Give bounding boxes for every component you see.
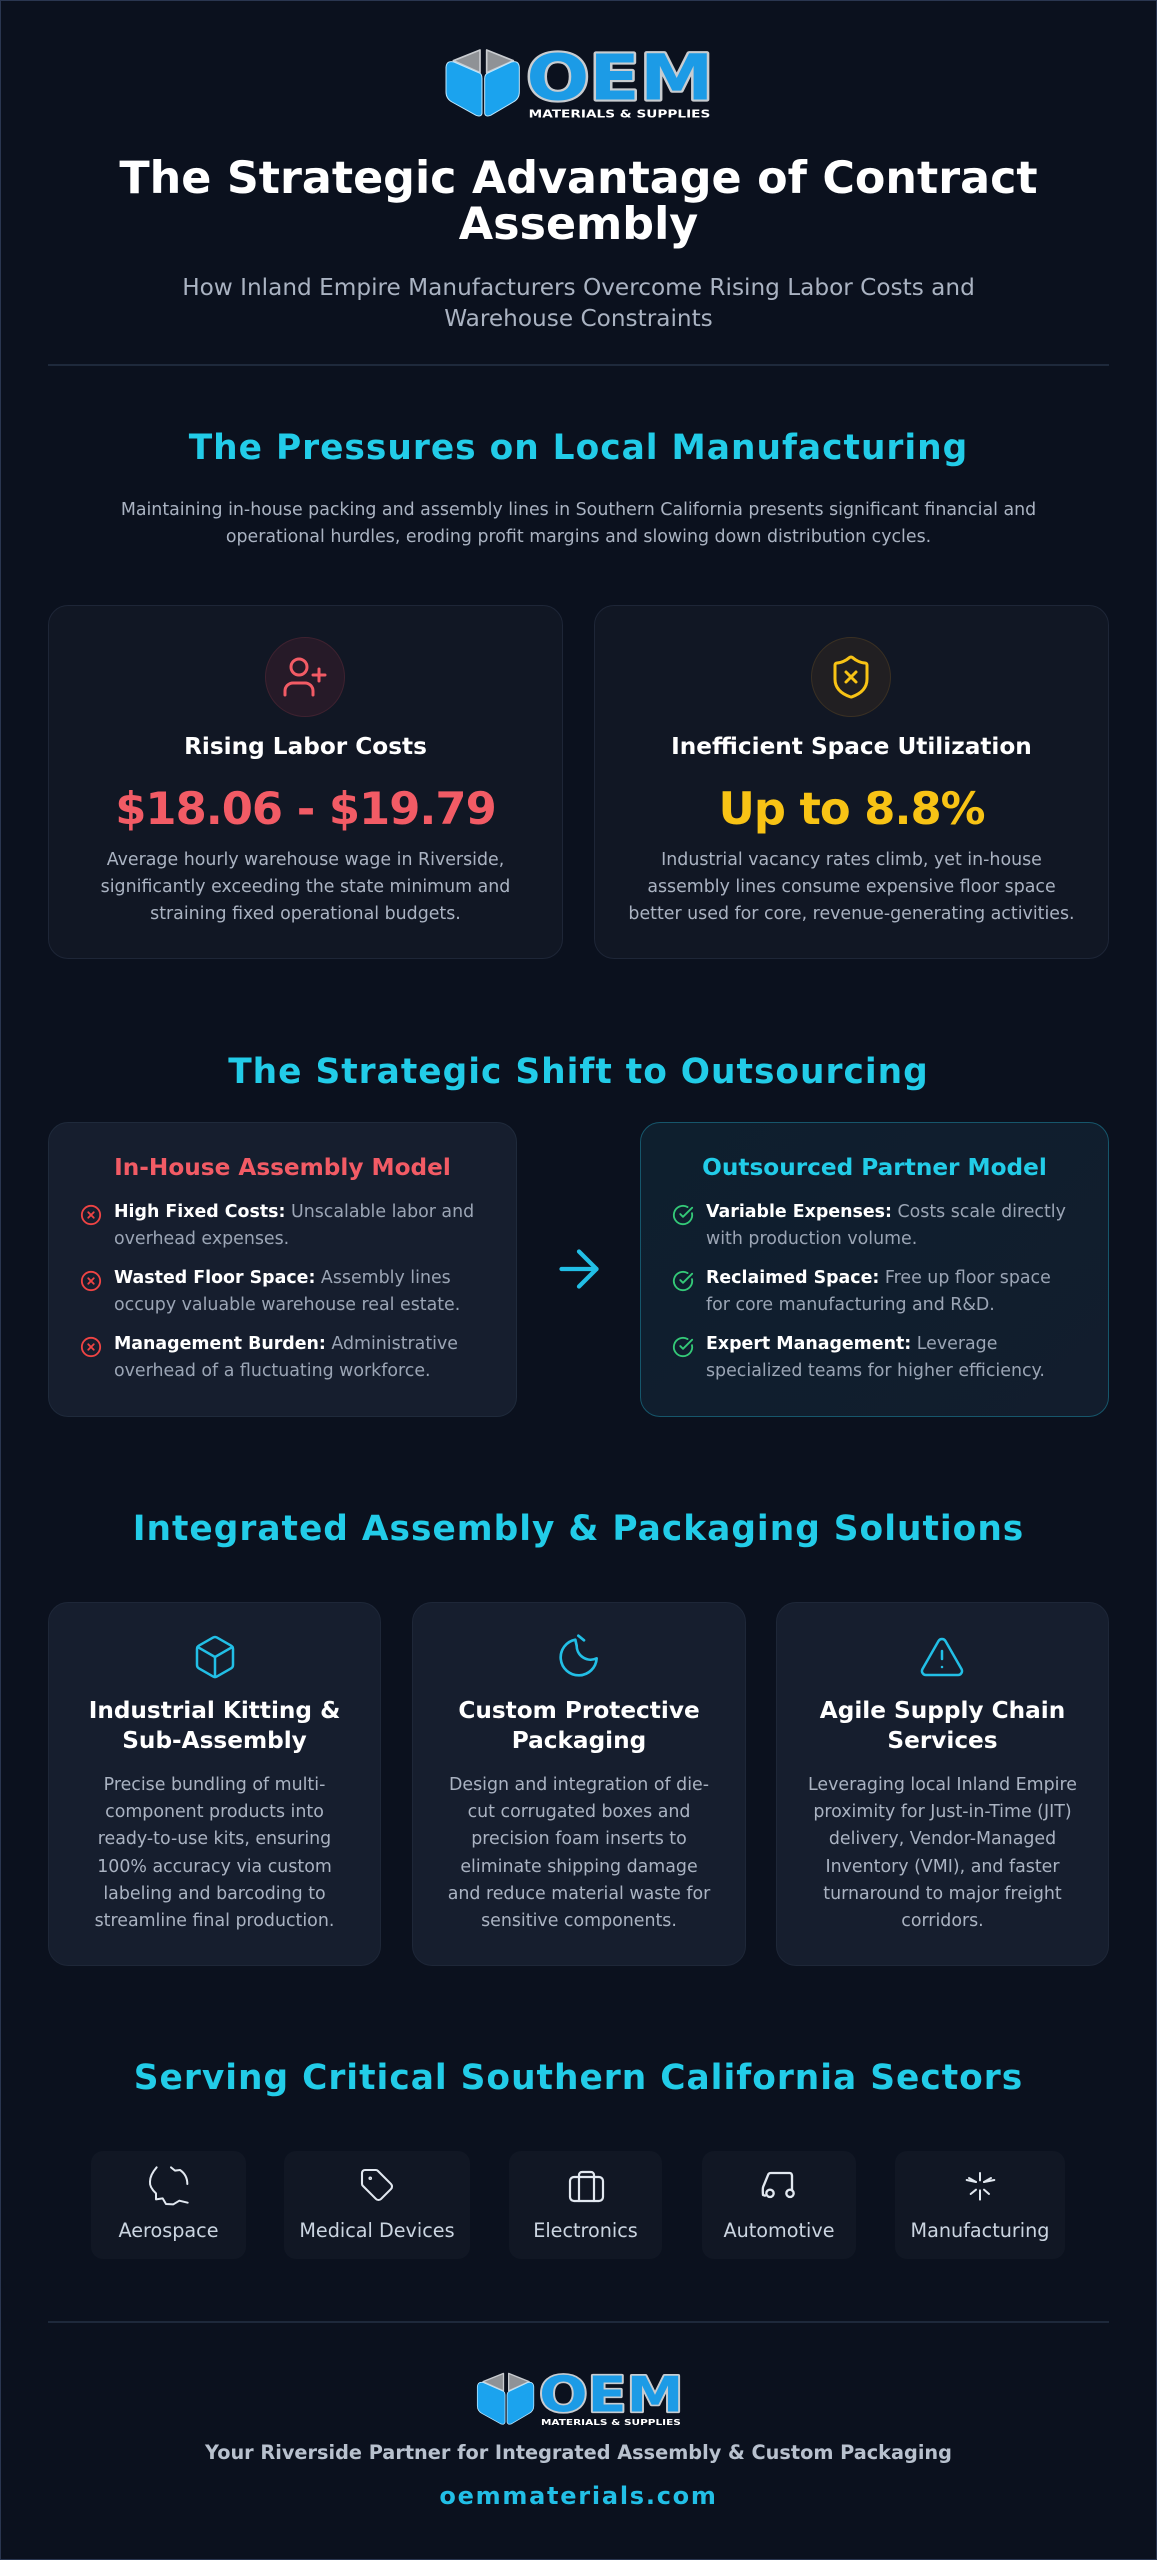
item: expert management: Expert Management: Leverage bbox=[706, 1334, 997, 1354]
arrow bbox=[559, 1249, 599, 1289]
description: eliminate shipping damage bbox=[460, 1857, 698, 1877]
item: wasted floor space: Wasted Floor Space: Assembly lines bbox=[114, 1268, 451, 1288]
card heading: Rising Labor Costs bbox=[184, 733, 427, 760]
chip: electronics bbox=[509, 2151, 662, 2259]
description: Design and integration of die- bbox=[449, 1775, 709, 1795]
item: reclaimed space: for core manufacturing and R&D. bbox=[706, 1295, 995, 1315]
panel: inefficient space bbox=[594, 605, 1109, 959]
card heading bbox=[820, 1697, 1065, 1754]
description bbox=[628, 850, 1075, 924]
item: management burden: Management Burden: Administrative bbox=[114, 1334, 458, 1354]
icon: user plus bbox=[265, 637, 345, 717]
icon: loader bbox=[966, 2172, 996, 2201]
panel: supply chain bbox=[776, 1602, 1109, 1966]
description: assembly lines consume expensive floor space bbox=[647, 877, 1056, 897]
subtitle bbox=[182, 274, 975, 332]
item: high fixed costs: High Fixed Costs: Unscalable labor and bbox=[114, 1202, 474, 1222]
icon: tag bbox=[360, 2169, 393, 2201]
card heading: Sub-Assembly bbox=[122, 1727, 307, 1754]
panel title: Outsourced Partner Model bbox=[702, 1154, 1047, 1181]
panel: kitting bbox=[48, 1602, 381, 1966]
item: expert management bbox=[672, 1334, 1045, 1381]
description: and reduce material waste for bbox=[448, 1884, 710, 1904]
chip: automotive bbox=[702, 2151, 856, 2259]
description: delivery, Vendor-Managed bbox=[829, 1829, 1056, 1849]
icon: shield x bbox=[811, 637, 891, 717]
logo: OEM Materials & Supplies: MATERIALS & SUPPLIES bbox=[529, 107, 710, 120]
heading: solutions: Integrated Assembly & Packaging Solutions bbox=[133, 1509, 1024, 1549]
description: Industrial vacancy rates climb, yet in-house bbox=[661, 850, 1042, 870]
description: straining fixed operational budgets. bbox=[150, 904, 461, 924]
description bbox=[808, 1775, 1077, 1931]
title: The Strategic Advantage of Contract bbox=[119, 153, 1038, 204]
item: variable expenses bbox=[672, 1202, 1066, 1249]
footer logo: MATERIALS & SUPPLIES bbox=[540, 2417, 680, 2427]
stat: Up to 8.8% bbox=[718, 782, 985, 835]
card heading: Packaging bbox=[512, 1727, 646, 1754]
logo: OEM Materials & Supplies: OEM bbox=[526, 41, 714, 115]
intro paragraph: operational hurdles, eroding profit margins and slowing down distribution cycles. bbox=[226, 527, 931, 547]
panel: in-house model bbox=[48, 1122, 517, 1417]
icon: box bbox=[196, 1636, 234, 1678]
chip: manufacturing bbox=[895, 2151, 1065, 2259]
card heading: Industrial Kitting & bbox=[89, 1697, 340, 1724]
description: sensitive components. bbox=[481, 1911, 677, 1931]
description: better used for core, revenue-generating activities. bbox=[628, 904, 1075, 924]
description: proximity for Just-in-Time (JIT) bbox=[813, 1802, 1072, 1822]
item: variable expenses: Variable Expenses: Costs scale directly bbox=[706, 1202, 1066, 1222]
item: management burden: overhead of a fluctuating workforce. bbox=[114, 1361, 431, 1381]
card heading: Custom Protective bbox=[458, 1697, 700, 1724]
footer tagline: Your Riverside Partner for Integrated Assembly & Custom Packaging bbox=[205, 2441, 952, 2464]
heading: pressures: The Pressures on Local Manufacturing bbox=[189, 428, 968, 468]
description: turnaround to major freight bbox=[823, 1884, 1062, 1904]
icon: vehicle bbox=[762, 2172, 795, 2198]
chip: aerospace bbox=[91, 2151, 246, 2259]
description: ready-to-use kits, ensuring bbox=[98, 1829, 331, 1849]
intro paragraph bbox=[121, 500, 1036, 547]
chip: medical devices bbox=[284, 2151, 470, 2259]
description: labeling and barcoding to bbox=[103, 1884, 326, 1904]
panel: rising labor costs bbox=[48, 605, 563, 959]
card heading: Inefficient Space Utilization bbox=[671, 733, 1032, 760]
card heading: Services bbox=[887, 1727, 998, 1754]
description: precision foam inserts to bbox=[471, 1829, 687, 1849]
description: Average hourly warehouse wage in Riverside, bbox=[107, 850, 504, 870]
description: significantly exceeding the state minimum and bbox=[101, 877, 510, 897]
item: management burden bbox=[80, 1334, 458, 1381]
item: reclaimed space bbox=[672, 1268, 1051, 1315]
description: Leveraging local Inland Empire bbox=[808, 1775, 1077, 1795]
label: Medical Devices bbox=[299, 2219, 455, 2242]
item: high fixed costs: overhead expenses. bbox=[114, 1229, 289, 1249]
footer url: oemmaterials.com bbox=[439, 2482, 718, 2510]
item: wasted floor space bbox=[80, 1268, 460, 1315]
description: streamline final production. bbox=[95, 1911, 334, 1931]
description: cut corrugated boxes and bbox=[468, 1802, 690, 1822]
card heading bbox=[89, 1697, 340, 1754]
item: expert management: specialized teams for higher efficiency. bbox=[706, 1361, 1045, 1381]
panel title: In-House Assembly Model bbox=[114, 1154, 451, 1181]
description bbox=[95, 1775, 334, 1931]
panel: outsourced model bbox=[640, 1122, 1109, 1417]
subtitle: How Inland Empire Manufacturers Overcome Rising Labor Costs and bbox=[182, 274, 975, 301]
description: corridors. bbox=[901, 1911, 984, 1931]
stat: $18.06 - $19.79 bbox=[115, 782, 496, 835]
footer logo bbox=[476, 2366, 683, 2427]
label: Automotive bbox=[724, 2219, 834, 2242]
logo: OEM Materials & Supplies bbox=[446, 41, 714, 120]
description: Precise bundling of multi- bbox=[104, 1775, 325, 1795]
description bbox=[448, 1775, 710, 1931]
title bbox=[119, 153, 1038, 250]
description: component products into bbox=[105, 1802, 324, 1822]
subtitle: Warehouse Constraints bbox=[444, 305, 713, 332]
item: high fixed costs bbox=[80, 1202, 474, 1249]
heading: sectors: Serving Critical Southern California Sectors bbox=[134, 2058, 1023, 2098]
icon: alert triangle bbox=[920, 1638, 964, 1676]
footer logo: OEM bbox=[539, 2366, 683, 2423]
intro paragraph: Maintaining in-house packing and assembly lines in Southern California presents significant financial and bbox=[121, 500, 1036, 520]
card heading: Agile Supply Chain bbox=[820, 1697, 1065, 1724]
description: Inventory (VMI), and faster bbox=[825, 1857, 1060, 1877]
icon: aerospace bbox=[149, 2166, 189, 2206]
card heading bbox=[458, 1697, 700, 1754]
label: Manufacturing bbox=[911, 2219, 1049, 2242]
item: reclaimed space: Reclaimed Space: Free up floor space bbox=[706, 1268, 1051, 1288]
item: wasted floor space: occupy valuable warehouse real estate. bbox=[114, 1295, 460, 1315]
icon: briefcase bbox=[568, 2170, 604, 2202]
heading: strategic shift: The Strategic Shift to Outsourcing bbox=[228, 1052, 929, 1092]
description: 100% accuracy via custom bbox=[97, 1857, 332, 1877]
description bbox=[101, 850, 510, 924]
panel: protective packaging bbox=[412, 1602, 746, 1966]
label: Electronics bbox=[533, 2219, 638, 2242]
title: Assembly bbox=[459, 199, 698, 250]
icon: moon bbox=[559, 1634, 598, 1677]
label: Aerospace bbox=[118, 2219, 219, 2242]
item: variable expenses: with production volume. bbox=[706, 1229, 917, 1249]
